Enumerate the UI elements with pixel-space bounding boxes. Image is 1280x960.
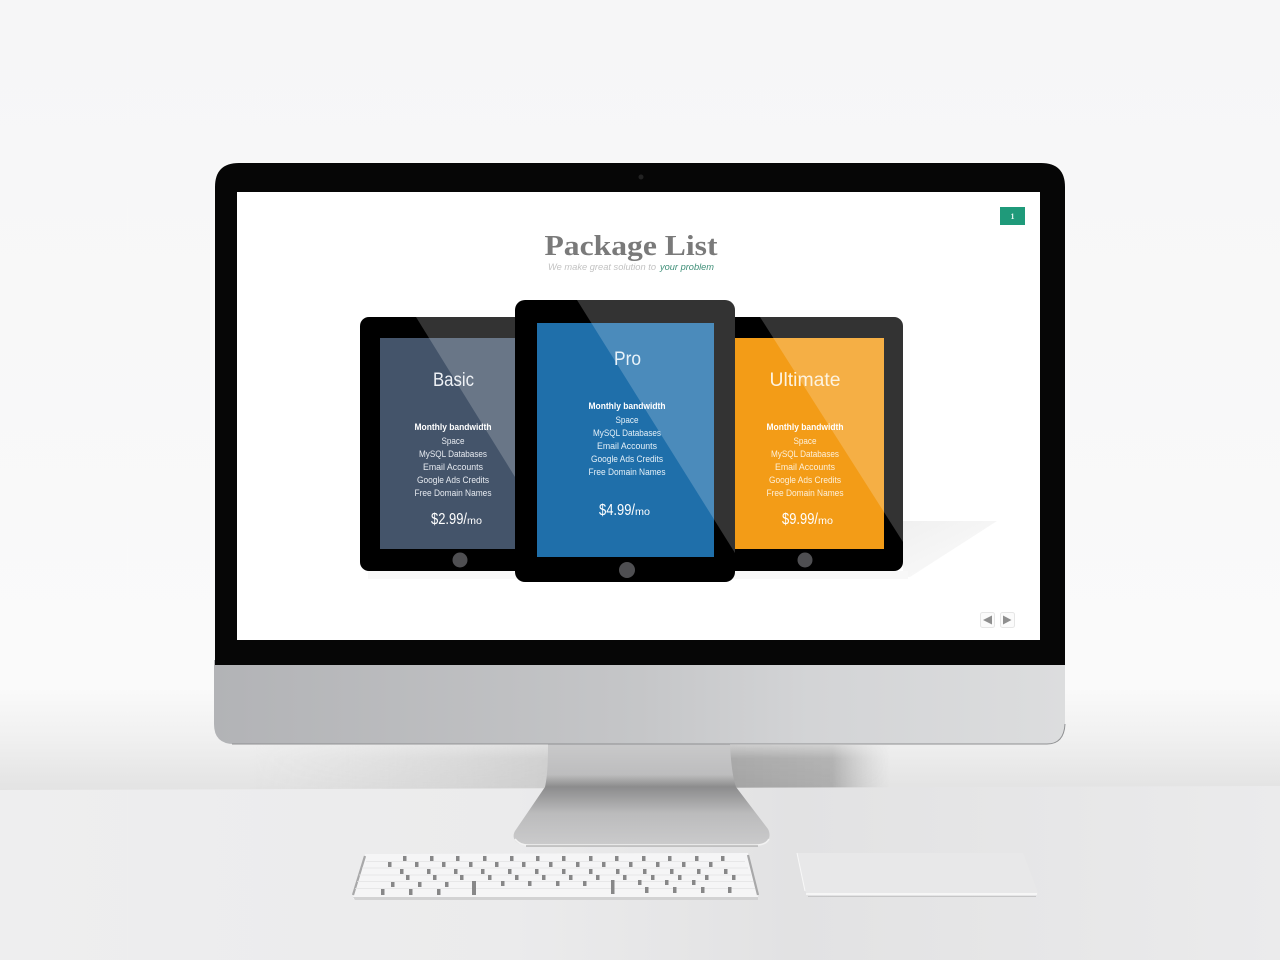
desk surface — [0, 786, 1280, 960]
price: $9.99/ — [782, 511, 819, 528]
tablet cast shadow — [368, 521, 997, 579]
feature list: Monthly bandwidth — [766, 422, 844, 432]
plan name: Ultimate — [770, 370, 840, 391]
price: $2.99/ — [431, 511, 468, 528]
feature list: Space — [794, 436, 816, 446]
feature list: Free Domain Names — [414, 488, 492, 498]
feature list: Monthly bandwidth — [588, 401, 666, 411]
title: Package List — [544, 230, 718, 262]
monitor — [214, 162, 1066, 744]
slide screen — [237, 192, 1040, 640]
feature list: Email Accounts — [775, 462, 835, 472]
panel: Basic tablet — [360, 317, 515, 571]
feature list: Google Ads Credits — [769, 475, 841, 485]
price: mo — [818, 515, 833, 527]
feature list: Email Accounts — [597, 441, 657, 451]
icon: next button — [1000, 612, 1014, 628]
price: $4.99/ — [599, 502, 636, 519]
camera — [638, 174, 644, 180]
trackpad — [797, 853, 1038, 896]
icon: home button — [619, 562, 635, 578]
feature list: Email Accounts — [423, 462, 483, 472]
keyboard — [353, 853, 758, 900]
price: mo — [467, 515, 482, 527]
icon: home button — [798, 552, 812, 568]
slide number badge: 1 — [1010, 212, 1014, 221]
feature list: Google Ads Credits — [591, 454, 663, 464]
feature list: MySQL Databases — [771, 449, 839, 459]
price: mo — [635, 506, 650, 518]
feature list — [766, 422, 844, 498]
monitor outline — [214, 162, 1066, 665]
keyboard key gaps — [381, 856, 736, 895]
panel: Ultimate tablet — [717, 317, 903, 571]
monitor bezel — [215, 163, 1065, 665]
monitor stand — [514, 744, 770, 846]
panel: Pro tablet — [515, 300, 735, 582]
feature list — [414, 422, 492, 498]
monitor shadow on wall — [348, 745, 878, 788]
feature list: MySQL Databases — [593, 428, 661, 438]
feature list — [588, 401, 666, 477]
feature list: Free Domain Names — [766, 488, 844, 498]
icon: home button — [452, 552, 468, 568]
feature list: Monthly bandwidth — [414, 422, 492, 432]
icon: previous button — [980, 612, 994, 628]
subtitle: We make great solution to — [548, 262, 656, 272]
plan name: Pro — [614, 349, 641, 370]
feature list: Space — [616, 415, 638, 425]
monitor chin — [214, 660, 1065, 744]
slide number badge — [1000, 207, 1025, 225]
subtitle: your problem — [659, 262, 715, 272]
plan name: Basic — [433, 370, 474, 391]
feature list: MySQL Databases — [419, 449, 487, 459]
feature list: Google Ads Credits — [417, 475, 489, 485]
feature list: Space — [442, 436, 464, 446]
feature list: Free Domain Names — [588, 467, 666, 477]
subtitle — [548, 262, 715, 272]
